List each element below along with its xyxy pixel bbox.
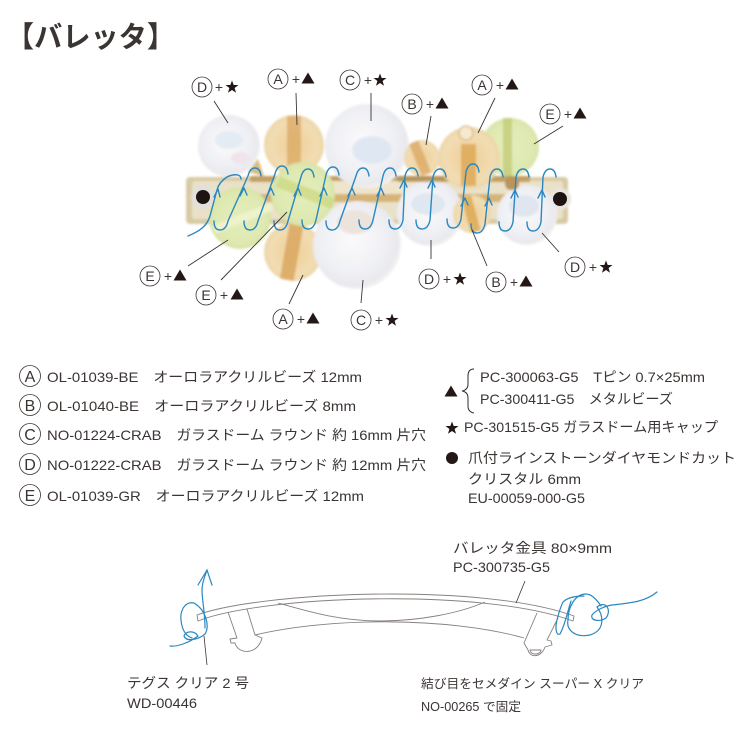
callout: A + triangle top: + xyxy=(292,71,300,87)
label: thread: WD-00446 xyxy=(127,695,197,711)
callout: A + triangle top xyxy=(268,69,314,89)
bead: E center xyxy=(271,162,336,226)
callout: E + triangle lower left: E xyxy=(145,268,155,284)
callout: D + star top left: + xyxy=(215,79,223,95)
callout: B + triangle lower: B xyxy=(491,274,501,290)
label: clip xyxy=(453,540,612,575)
part A: A xyxy=(25,369,36,386)
part E: E xyxy=(25,488,35,505)
callout: E + triangle right: E xyxy=(545,106,555,122)
callout: D + star top left: D xyxy=(197,79,207,95)
callout: A + triangle right: + xyxy=(496,77,504,93)
part C: NO-01224-CRAB ガラスドーム ラウンド 約 16mm 片穴 xyxy=(47,427,426,443)
leader lines xyxy=(188,93,563,304)
cap gold xyxy=(248,159,264,176)
bead: D right xyxy=(497,185,557,245)
callout: B + triangle xyxy=(402,94,448,114)
leader: to clip xyxy=(516,581,525,603)
bead: E left xyxy=(209,187,273,249)
parts list: triangle pins: PC-300411-G5 メタルビーズ xyxy=(480,391,673,407)
rhinestone setting left xyxy=(191,185,215,209)
callout: A + triangle right: A xyxy=(477,77,487,93)
rhinestone right xyxy=(553,192,567,206)
part E: OL-01039-GR オーロラアクリルビーズ 12mm xyxy=(47,488,364,504)
title: 【バレッタ】 xyxy=(6,21,175,54)
bead: D top left xyxy=(198,115,260,177)
label: glue note: 結び目をセメダイン スーパー X クリア xyxy=(421,676,644,691)
parts list: triangle pins: PC-300063-G5 Tピン 0.7×25mm xyxy=(480,369,705,385)
callout: A + triangle right xyxy=(472,75,518,95)
part B: OL-01040-BE オーロラアクリルビーズ 8mm xyxy=(47,398,356,414)
callout: E + triangle right: + xyxy=(564,106,572,122)
parts list: rhinestone xyxy=(446,450,736,506)
beads and barrette xyxy=(186,104,571,289)
label: thread xyxy=(127,675,249,711)
callout: B + triangle: B xyxy=(407,96,417,112)
part A: OL-01039-BE オーロラアクリルビーズ 12mm xyxy=(47,369,362,385)
label: clip: PC-300735-G5 xyxy=(453,559,550,575)
rhinestone left xyxy=(196,190,210,204)
callout: A + triangle top: A xyxy=(273,71,283,87)
bead: E right xyxy=(481,118,539,176)
bead: B right xyxy=(404,140,440,176)
metal bits xyxy=(398,176,519,190)
callout: E + triangle lower xyxy=(196,285,244,305)
parts list: rhinestone: EU-00059-000-G5 xyxy=(468,490,585,506)
bead: A top xyxy=(264,115,324,175)
callout: E + triangle lower: + xyxy=(220,287,228,303)
callout: A + triangle lower: + xyxy=(297,311,305,327)
thread left xyxy=(170,570,212,646)
part B: B xyxy=(25,398,35,415)
callout: C + star lower: C xyxy=(356,312,366,328)
callout: C + star lower: + xyxy=(375,312,383,328)
parts list: triangle pins xyxy=(444,369,705,413)
callout: D + star lower xyxy=(419,269,466,289)
bead: D bottom xyxy=(397,180,463,246)
part E xyxy=(20,484,364,506)
parts list: rhinestone: 爪付ラインストーンダイヤモンドカット xyxy=(468,450,736,466)
part A xyxy=(20,366,362,386)
blue thread wraps xyxy=(188,164,556,236)
bead: B bottom xyxy=(453,195,491,233)
diagram: barrette clip with thread xyxy=(170,570,657,656)
bead: A right xyxy=(438,126,500,189)
part B xyxy=(20,394,356,416)
callout: D + star right xyxy=(565,257,612,277)
callout: E + triangle right xyxy=(540,104,586,124)
photo: barrette with beads xyxy=(186,104,571,289)
part D: D xyxy=(24,457,36,474)
callout: E + triangle lower: E xyxy=(201,287,211,303)
bead: C bottom xyxy=(313,201,401,289)
bead: C top xyxy=(325,104,409,188)
callout: C + star top xyxy=(340,70,386,90)
part C xyxy=(20,424,426,444)
parts list: beads xyxy=(20,366,426,506)
label: glue note xyxy=(421,676,644,714)
parts list: rhinestone: クリスタル 6mm xyxy=(468,471,581,487)
callout: B + triangle lower: + xyxy=(510,274,518,290)
label: clip: バレッタ金具 80×9mm xyxy=(453,540,612,556)
parts list: star cap: PC-301515-G5 ガラスドーム用キャップ xyxy=(464,419,718,435)
rhinestone setting right xyxy=(549,188,571,210)
callout: C + star top: C xyxy=(345,72,355,88)
label: thread: テグス クリア 2 号 xyxy=(127,675,249,691)
part C: C xyxy=(24,427,36,444)
thread right xyxy=(556,592,657,636)
callout: D + star top left xyxy=(192,77,238,97)
callout: A + triangle lower: A xyxy=(278,311,288,327)
barrette bar xyxy=(186,176,568,224)
callout: C + star lower xyxy=(351,310,398,330)
callout: B + triangle lower xyxy=(486,272,532,292)
callout: D + star lower: + xyxy=(443,271,451,287)
callout: E + triangle lower left: + xyxy=(164,268,172,284)
label: glue note: NO-00265 で固定 xyxy=(421,700,521,714)
leader: to thread xyxy=(204,636,207,665)
clip metal xyxy=(197,594,574,656)
bead: A bottom xyxy=(264,221,322,281)
callout: B + triangle: + xyxy=(426,96,434,112)
callout: E + triangle lower left xyxy=(140,266,186,286)
callout: D + star lower: D xyxy=(424,271,434,287)
callout: C + star top: + xyxy=(364,72,372,88)
callout: D + star right: + xyxy=(589,259,597,275)
part D: NO-01222-CRAB ガラスドーム ラウンド 約 12mm 片穴 xyxy=(47,457,426,473)
callout: A + triangle lower xyxy=(273,309,320,329)
part D xyxy=(20,454,426,474)
callout: D + star right: D xyxy=(570,259,580,275)
